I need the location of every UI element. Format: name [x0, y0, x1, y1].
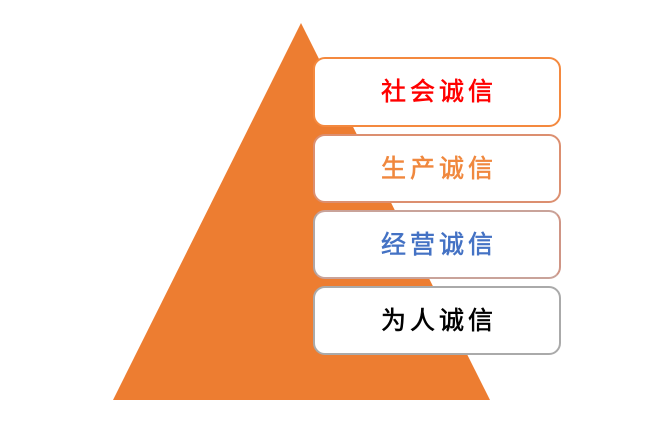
- text: business integrity: 经营诚信: [381, 230, 497, 258]
- text: production integrity: 生产诚信: [381, 154, 497, 182]
- text: social integrity: 社会诚信: [381, 78, 497, 106]
- text: personal integrity: 为人诚信: [381, 306, 497, 334]
- panel: social integrity: [313, 57, 561, 127]
- panel: personal integrity: [313, 286, 561, 355]
- panel: business integrity: [313, 210, 561, 279]
- panel: production integrity: [313, 134, 561, 203]
